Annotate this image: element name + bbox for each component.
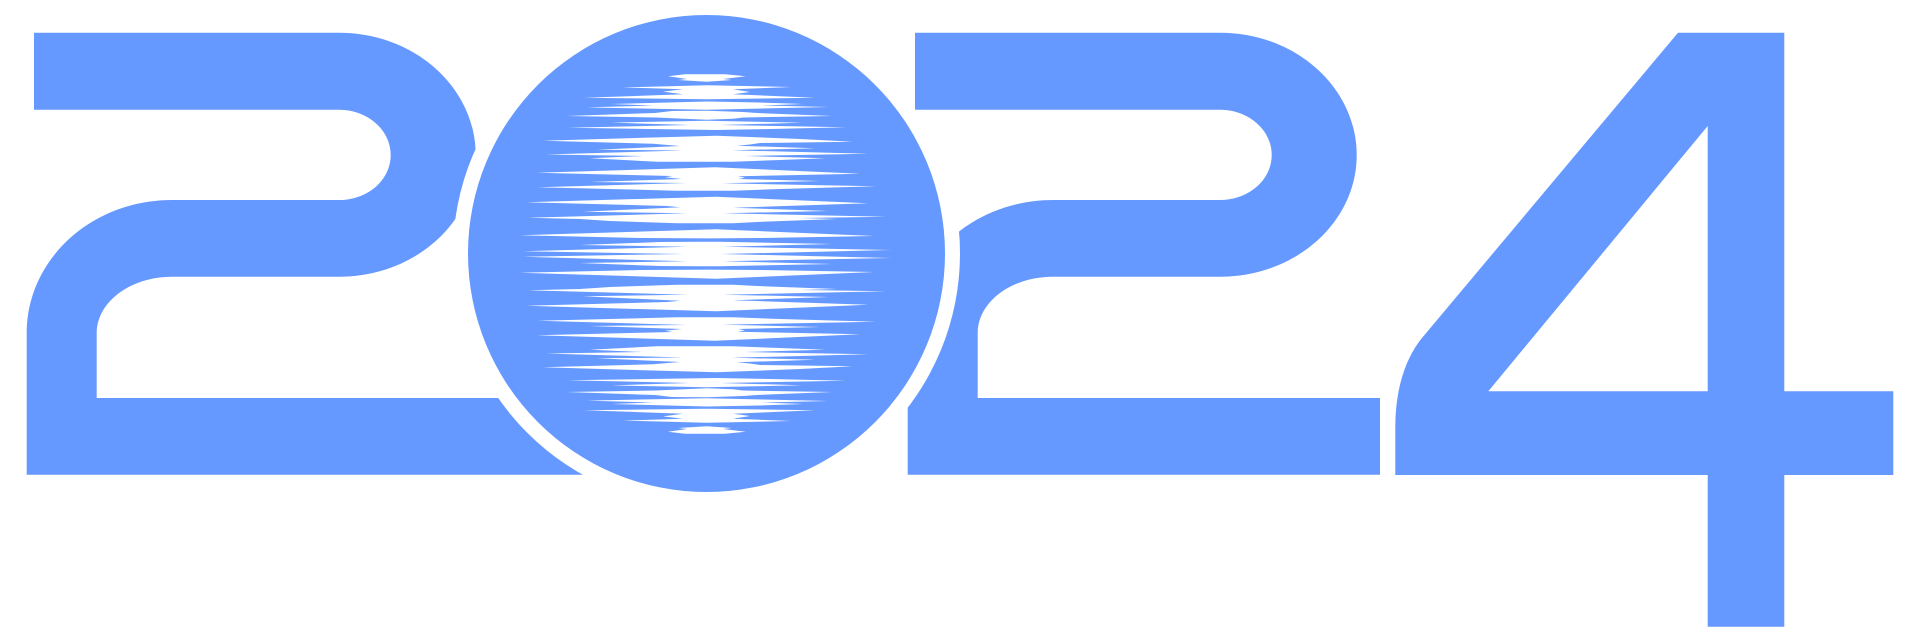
white halo ring around the globe <box>453 0 960 507</box>
globe disc <box>468 15 945 492</box>
digit: 0 as blue globe with white light stripes <box>468 15 945 492</box>
digit: second 2 <box>908 33 1380 475</box>
stripes: upper half <box>520 74 892 254</box>
stripes: lower half <box>520 254 892 434</box>
digit: 4 <box>1395 33 1893 627</box>
digit: first 2 <box>27 33 700 475</box>
